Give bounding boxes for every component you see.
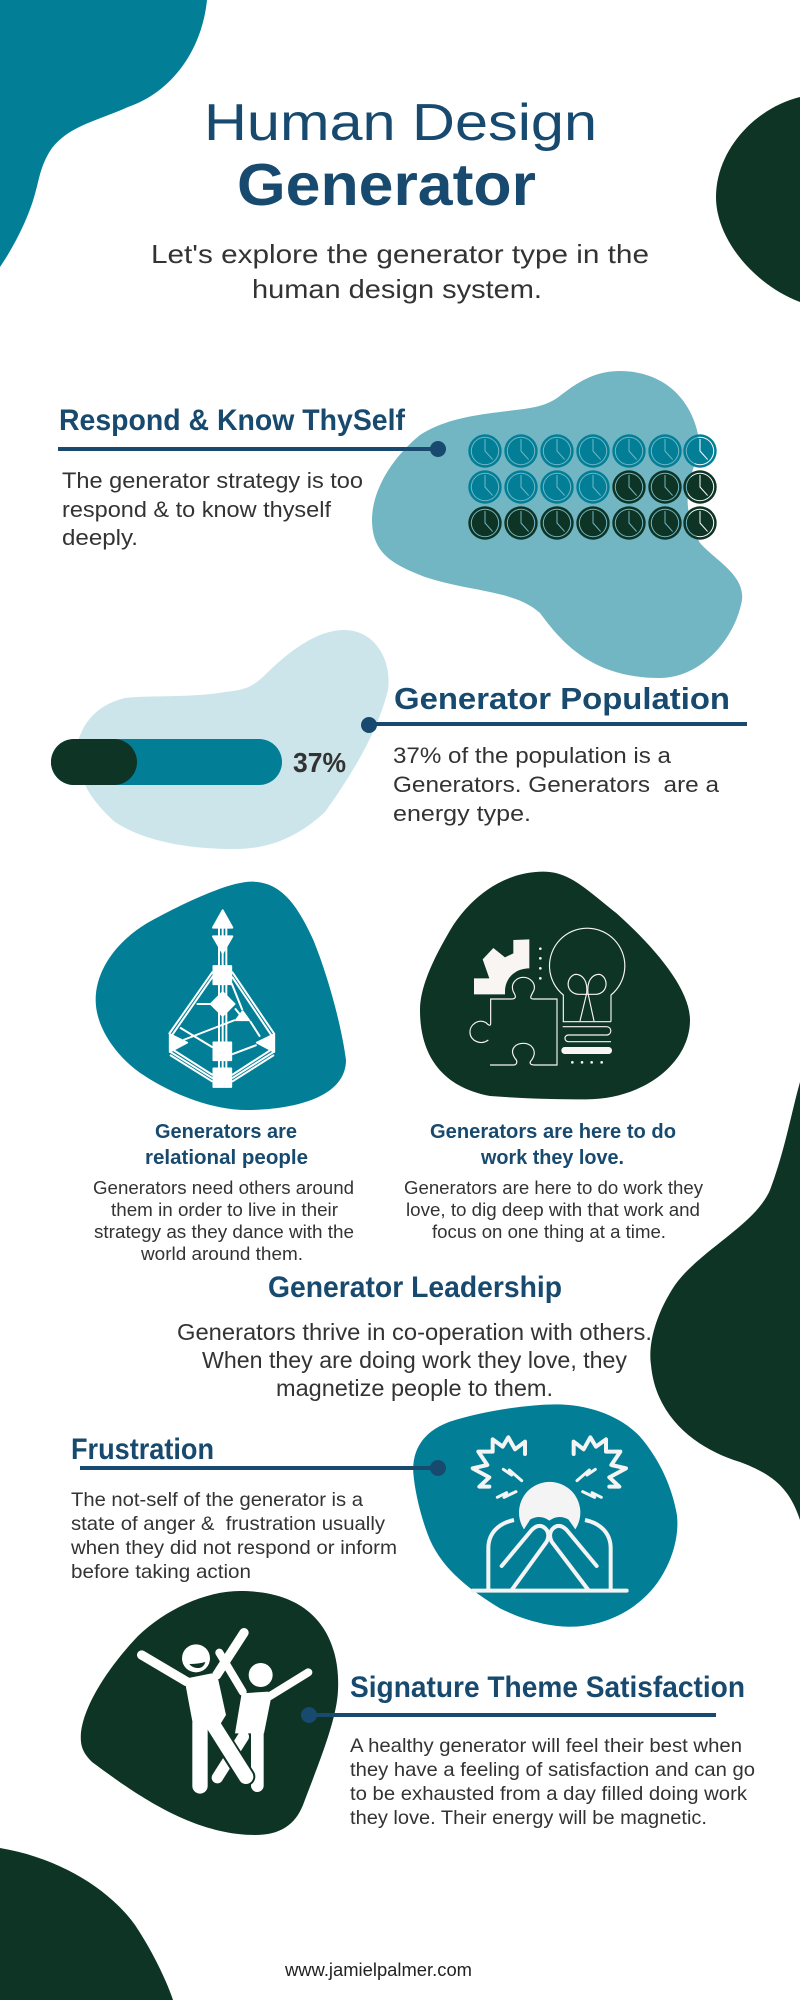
icon: frustrated person <box>473 1437 627 1591</box>
connector line and dot <box>80 1460 446 1476</box>
background blob: top right <box>716 97 800 302</box>
heading: Generator Leadership: Generator Leadership <box>268 1271 562 1304</box>
body text: leadership: magnetize people to them. <box>276 1375 553 1401</box>
clock pictogram grid <box>468 434 717 540</box>
body text: population: energy type. <box>393 801 531 826</box>
panel: frustration <box>70 1404 677 1627</box>
heading: Frustration: Frustration <box>71 1433 214 1466</box>
panel: work they love <box>404 872 703 1242</box>
connector line and dot <box>361 717 747 733</box>
panel: signature theme satisfaction <box>81 1591 755 1835</box>
body text: frustration: state of anger & frustration usually <box>71 1513 385 1535</box>
body text: frustration: before taking action <box>71 1561 251 1583</box>
body text: population: 37% of the population is a <box>393 743 672 768</box>
body text: frustration: The not-self of the generator is a <box>71 1489 363 1511</box>
icon: gear, puzzle piece and light bulb <box>470 928 625 1065</box>
footer website: www.jamielpalmer.com <box>284 1960 472 1980</box>
body text: leadership: When they are doing work they love, they <box>202 1347 627 1373</box>
body text: work they love: focus on one thing at a time. <box>432 1222 666 1242</box>
background blob: mid right <box>650 1082 800 1520</box>
body text: strategy: deeply. <box>62 525 138 550</box>
panel: relational people <box>93 882 354 1264</box>
body text: relational: strategy as they dance with the <box>94 1222 354 1242</box>
title block <box>151 94 649 304</box>
heading: Generators are here to do work they love: Generators are here to do <box>430 1121 676 1143</box>
stat: 37 percent: 37% <box>293 747 346 778</box>
body text: work they love: Generators are here to do work they <box>404 1178 703 1198</box>
progress bar: 37 percent <box>51 739 282 785</box>
heading: Generators are here to do work they love: work they love. <box>480 1147 624 1169</box>
body text: work they love: love, to dig deep with that work and <box>406 1200 700 1220</box>
heading: Generators are relational people: Generators are <box>155 1121 297 1143</box>
heading: Generators are relational people: relational people <box>145 1147 308 1169</box>
panel: respond and know thyself <box>58 371 742 678</box>
body text: satisfaction: A healthy generator will feel their best when <box>350 1735 742 1757</box>
body text: strategy: respond & to know thyself <box>62 497 332 522</box>
subtitle: Let's explore the generator type in the <box>151 239 649 269</box>
title line: Generator: Generator <box>237 152 536 218</box>
heading: Respond and Know ThySelf: Respond & Know ThySelf <box>59 404 406 437</box>
heading: Signature Theme Satisfaction: Signature Theme Satisfaction <box>350 1671 745 1704</box>
body text: satisfaction: they have a feeling of satisfaction and can go <box>350 1759 755 1781</box>
connector line and dot <box>58 441 446 457</box>
blob: respond panel <box>372 371 742 678</box>
panel: generator leadership <box>177 1271 652 1401</box>
body text: frustration: when they did not respond or inform <box>70 1537 397 1559</box>
body text: relational: Generators need others around <box>93 1178 354 1198</box>
icon: human design bodygraph <box>169 910 274 1088</box>
blob with bodygraph icon <box>96 882 346 1110</box>
blob: satisfaction panel <box>81 1591 338 1835</box>
title line: Human Design: Human Design <box>204 94 597 152</box>
connector line and dot <box>301 1707 716 1723</box>
body text: relational: world around them. <box>140 1244 303 1264</box>
icon: two jumping people <box>142 1633 308 1786</box>
body text: strategy: The generator strategy is too <box>62 468 363 493</box>
body text: relational: them in order to live in their <box>111 1200 338 1220</box>
subtitle: human design system. <box>252 274 542 304</box>
body text: population: Generators. Generators are a <box>393 772 720 797</box>
body text: satisfaction: to be exhausted from a day filled doing work <box>350 1783 747 1805</box>
blob: population panel <box>77 630 389 849</box>
heading: Generator Population: Generator Population <box>394 681 730 716</box>
blob with frustrated person icon <box>413 1404 677 1627</box>
blob with puzzle and bulb icon <box>420 872 690 1099</box>
body text: leadership: Generators thrive in co-operation with others. <box>177 1319 652 1345</box>
background blob: bottom left <box>0 1848 173 2000</box>
body text: satisfaction: they love. Their energy will be magnetic. <box>350 1807 707 1829</box>
background blob: top left <box>0 0 207 267</box>
panel: generator population <box>51 630 747 849</box>
